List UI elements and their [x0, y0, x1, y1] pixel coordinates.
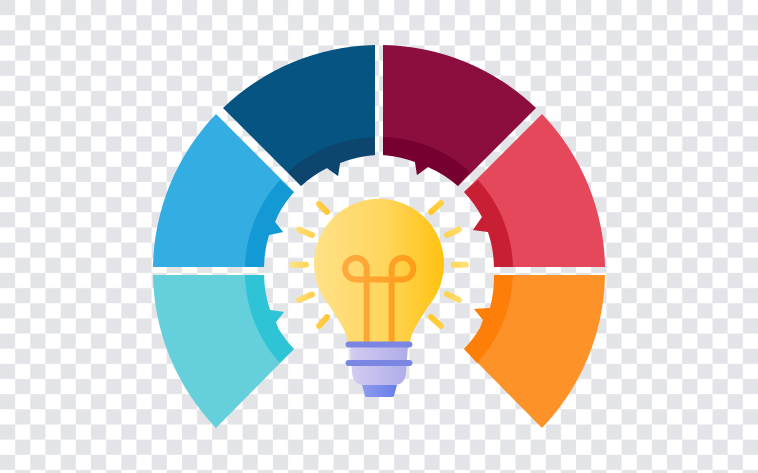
panel: red segment [464, 114, 605, 267]
panel: teal segment [153, 275, 294, 428]
bulb screw base [346, 342, 412, 397]
bulb glass [314, 199, 444, 342]
panel: orange segment [464, 275, 605, 428]
panel: blue segment [153, 114, 294, 267]
icon: light bulb [314, 199, 444, 397]
panel: navy segment [223, 45, 375, 186]
icon: light rays [292, 203, 466, 326]
panel: maroon segment [383, 45, 536, 186]
filament [345, 258, 413, 342]
